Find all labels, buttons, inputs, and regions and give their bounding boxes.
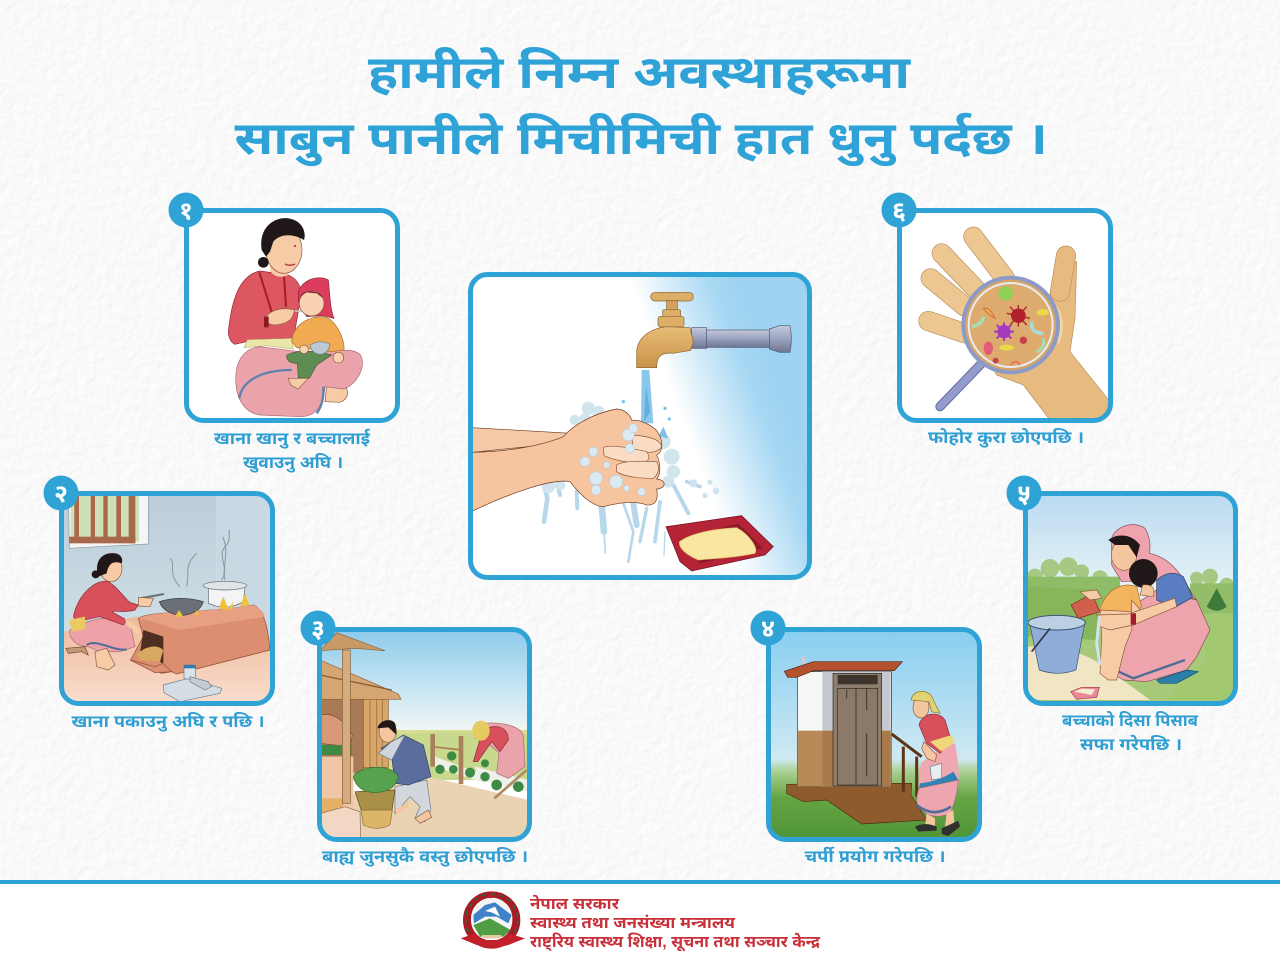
caption: सफा गरेपछि । — [1080, 734, 1182, 754]
illustration: tap, hands and soap — [470, 275, 810, 578]
caption: बाह्य जुनसुकै वस्तु छोएपछि । — [322, 845, 528, 867]
illustration: farm scene with man and basket — [315, 627, 532, 840]
badge: number 5 — [1006, 476, 1042, 510]
caption — [214, 428, 371, 473]
caption: चर्पी प्रयोग गरेपछि । — [804, 846, 946, 866]
organisation name lines — [530, 894, 821, 952]
badge: number 2 — [44, 476, 78, 510]
badge: number 3: ३ — [311, 615, 325, 643]
caption — [1062, 710, 1198, 754]
organisation name lines: नेपाल सरकार — [530, 894, 620, 913]
frame — [186, 210, 398, 420]
title: साबुन पानीले मिचीमिची हात धुनु पर्दछ । — [234, 111, 1048, 166]
illustration: hand with magnifier showing germs — [928, 237, 1110, 420]
panel 2: before and after cooking — [44, 476, 277, 732]
panel 1: feeding a child — [168, 192, 398, 473]
frame — [1026, 494, 1236, 704]
panel 5: after cleaning a child — [1006, 476, 1240, 754]
organisation name lines: राष्ट्रिय स्वास्थ्य शिक्षा, सूचना तथा सञ्चार केन्द्र — [530, 932, 821, 952]
illustration: woman at toilet — [765, 627, 982, 840]
organisation name lines: स्वास्थ्य तथा जनसंख्या मन्त्रालय — [530, 914, 736, 932]
frame — [320, 630, 530, 840]
title — [234, 45, 1048, 166]
frame — [62, 494, 272, 704]
caption: खुवाउनु अघि । — [243, 452, 343, 473]
illustration: mother feeding child — [228, 218, 362, 417]
footer: government logo and names — [461, 893, 821, 952]
footer rule — [0, 880, 1280, 884]
panel 3: after touching outside things — [300, 610, 532, 867]
badge: number 1 — [168, 192, 204, 228]
title: हामीले निम्न अवस्थाहरूमा — [368, 45, 912, 98]
badge: number 3 — [300, 610, 336, 646]
caption: बच्चाको दिसा पिसाब — [1062, 710, 1198, 730]
badge: number 1: १ — [179, 197, 193, 225]
panel: central hand washing illustration — [470, 274, 810, 578]
badge: number 5: ५ — [1017, 480, 1031, 508]
badge: number 2: २ — [54, 480, 68, 508]
panel 4: after using the toilet — [750, 610, 982, 866]
illustration: mother washing child by bucket — [1028, 496, 1233, 701]
badge: number 6 — [882, 192, 916, 228]
badge: number 4 — [750, 610, 786, 646]
panel 6: after touching dirty things — [882, 192, 1111, 448]
frame — [470, 274, 810, 578]
caption: खाना खानु र बच्चालाई — [214, 428, 371, 449]
caption: फोहोर कुरा छोएपछि । — [928, 427, 1084, 448]
emblem of Nepal — [461, 893, 525, 948]
badge: number 6: ६ — [892, 197, 906, 225]
frame — [768, 630, 980, 840]
caption: खाना पकाउनु अघि र पछि । — [72, 711, 264, 732]
illustration: woman cooking at clay stove — [64, 496, 270, 701]
badge: number 4: ४ — [761, 615, 775, 643]
frame — [900, 210, 1110, 420]
